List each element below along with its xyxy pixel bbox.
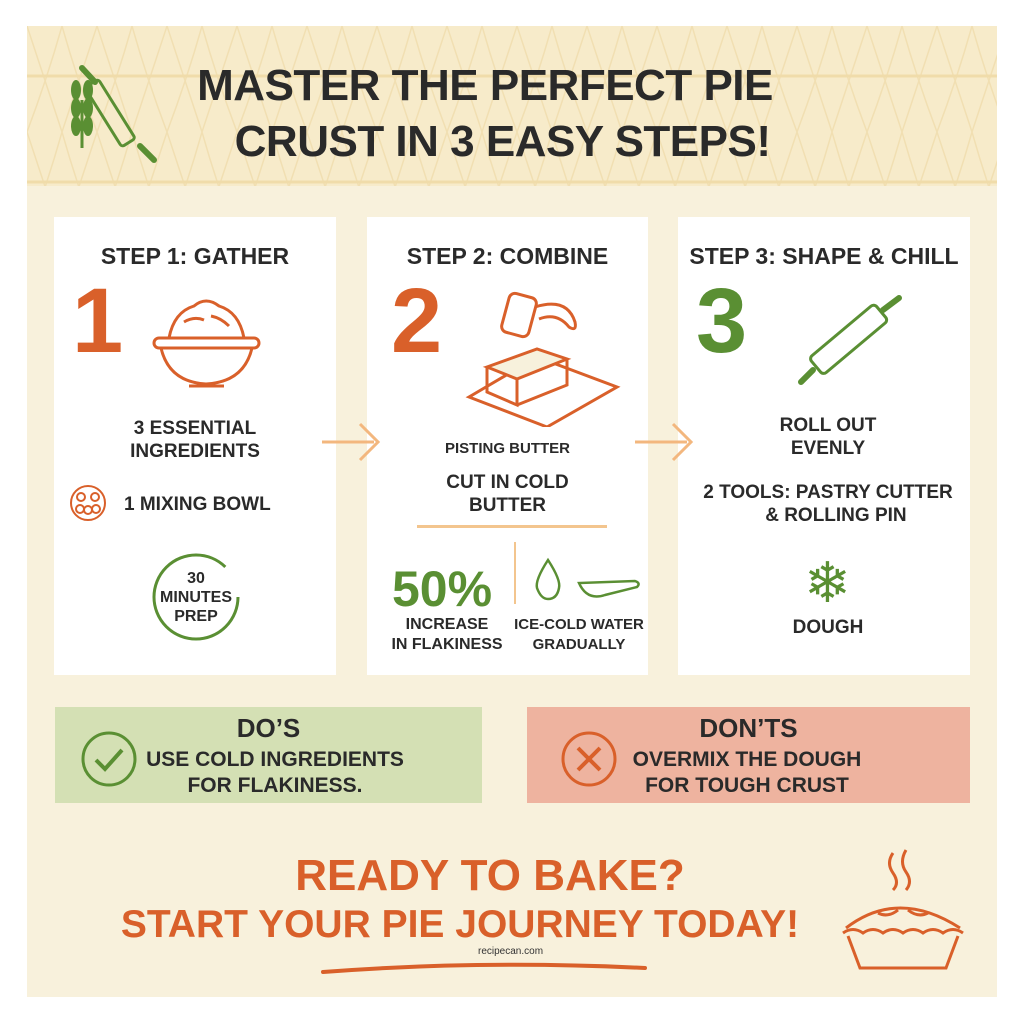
panel: step 1: 3 ESSENTIAL (134, 418, 256, 439)
panel: do's: DO’S (237, 713, 300, 743)
panel: step 2 (367, 217, 648, 675)
panel: step 2: 2 (391, 270, 442, 372)
panel: step 2: BUTTER (469, 495, 546, 516)
panel: step 3: STEP 3: SHAPE & CHILL (689, 243, 959, 269)
icon: butter and cutter (466, 292, 620, 427)
stat: 50%: 50% (392, 561, 492, 617)
panel: step 1: 1 (72, 270, 123, 372)
panel: don'ts (527, 707, 970, 803)
panel: step 1: PREP (174, 608, 218, 625)
panel: step 3: 2 TOOLS: PASTRY CUTTER (703, 482, 953, 503)
text: recipecan.com (478, 946, 543, 957)
panel: step 2: CUT IN COLD (446, 472, 569, 493)
panel: step 2: GRADUALLY (533, 636, 625, 653)
icon: bowl (152, 300, 260, 388)
panel: step 3 (678, 217, 970, 675)
panel: do's (55, 707, 482, 803)
title (197, 61, 773, 166)
panel: do's: USE COLD INGREDIENTS (146, 748, 404, 771)
panel: step 2: STEP 2: COMBINE (407, 243, 608, 269)
panel: step 3: DOUGH (793, 617, 863, 638)
icon: wheat and rolling pin (71, 65, 157, 163)
icon: snowflake: ❄ (804, 551, 851, 614)
panel: step 1: 1 MIXING BOWL (124, 494, 271, 515)
call to action (121, 851, 799, 946)
panel: step 1: STEP 1: GATHER (101, 243, 289, 269)
title: MASTER THE PERFECT PIE (197, 61, 773, 110)
panel: don'ts: FOR TOUGH CRUST (645, 774, 849, 797)
panel: step 3: & ROLLING PIN (765, 505, 907, 526)
call to action: START YOUR PIE JOURNEY TODAY! (121, 903, 799, 946)
panel: don'ts: OVERMIX THE DOUGH (633, 748, 861, 771)
panel: step 2: PISTING BUTTER (445, 440, 570, 457)
icon: rolling pin (798, 295, 902, 385)
panel: do's: FOR FLAKINESS. (187, 774, 362, 797)
call to action: READY TO BAKE? (295, 851, 685, 900)
panel: step 3: ROLL OUT (780, 415, 876, 436)
panel: step 1 (54, 217, 336, 675)
arrow 1 (322, 423, 380, 461)
panel: step 2: ICE-COLD WATER (514, 616, 644, 633)
panel: step 3: EVENLY (791, 438, 865, 459)
header band (27, 26, 997, 186)
panel: don'ts: DON’TS (699, 713, 798, 743)
panel: step 2: INCREASE (406, 616, 488, 633)
title: CRUST IN 3 EASY STEPS! (235, 117, 771, 166)
panel: step 1: 30 (187, 570, 205, 587)
panel: step 3: 3 (696, 270, 747, 372)
panel: step 2: IN FLAKINESS (391, 636, 503, 653)
panel: step 1: MINUTES (160, 589, 232, 606)
panel: step 1: INGREDIENTS (130, 441, 260, 462)
icon: pie (842, 849, 964, 970)
icon: drop and spoon (536, 558, 640, 600)
icon: 30 min timer (152, 554, 240, 640)
arrow 2 (635, 423, 693, 461)
icon: ingredients circle (70, 485, 106, 521)
